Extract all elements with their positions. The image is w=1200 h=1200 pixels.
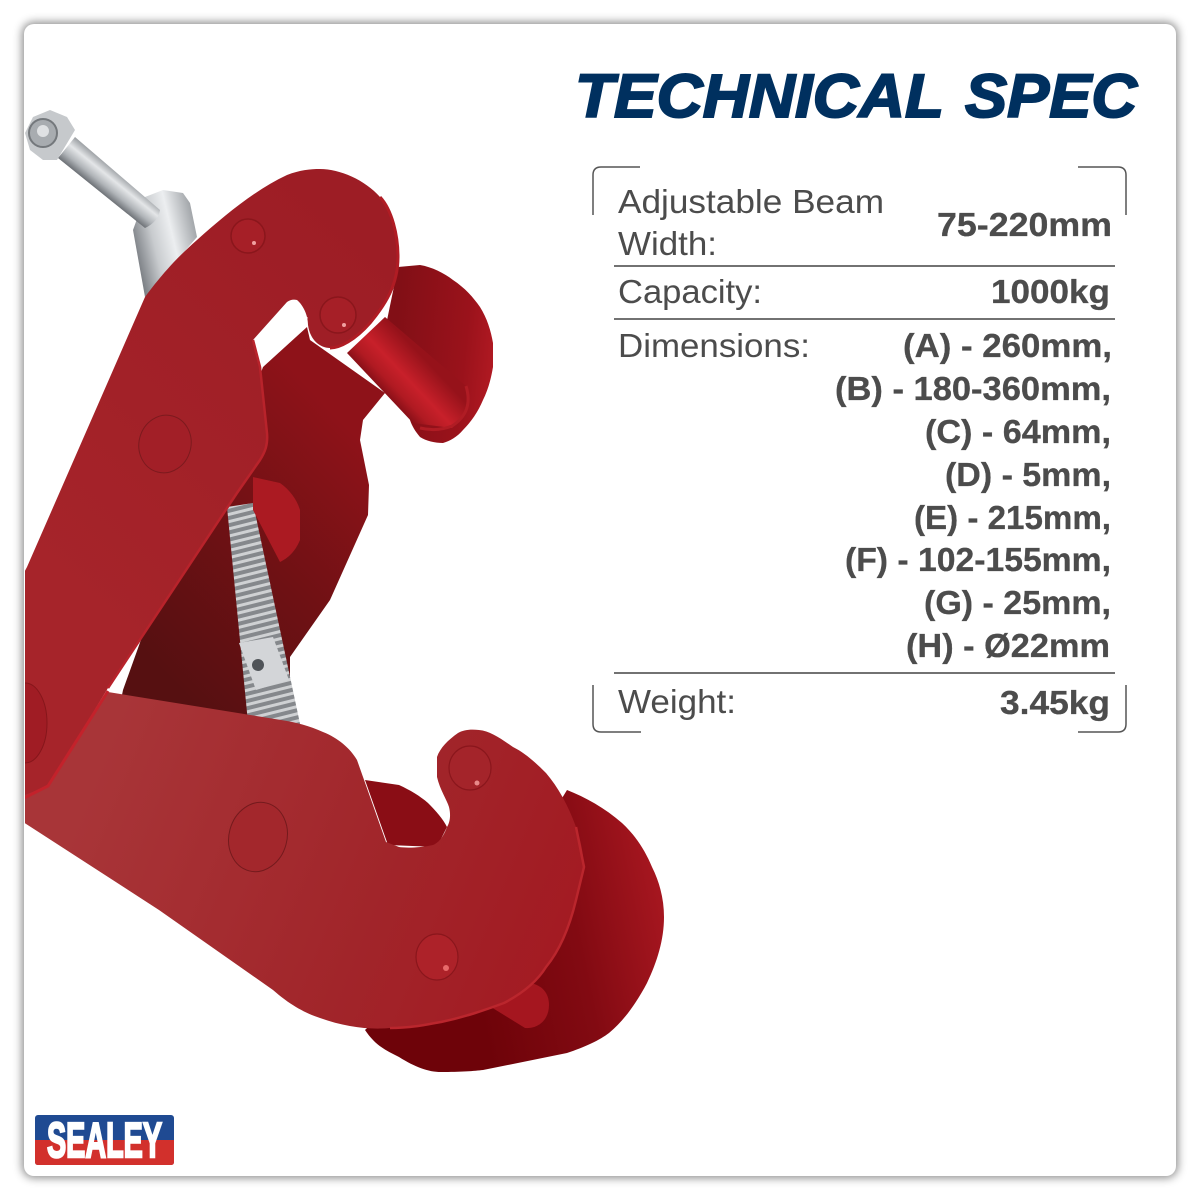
product photo: red beam clamp bbox=[3, 110, 664, 1072]
row: dimensions: Dimensions: bbox=[618, 327, 810, 364]
row: adjustable beam width: Adjustable Beam bbox=[618, 183, 884, 220]
logo: Sealey: SEALEY bbox=[47, 1114, 162, 1168]
row: dimensions: (C) - 64mm, bbox=[925, 413, 1111, 450]
bolt bbox=[231, 219, 265, 253]
row: dimensions: (D) - 5mm, bbox=[945, 456, 1111, 493]
spec table brackets bbox=[593, 167, 1126, 732]
row: weight: Weight: bbox=[618, 683, 736, 720]
row: dimensions: (F) - 102-155mm, bbox=[845, 541, 1111, 578]
pin upper bbox=[347, 317, 468, 428]
row: dimensions: (B) - 180-360mm, bbox=[835, 370, 1111, 407]
row: capacity: 1000kg bbox=[991, 273, 1110, 310]
row: adjustable beam width: Width: bbox=[618, 225, 717, 262]
slot opening bbox=[263, 316, 308, 367]
rivet bbox=[138, 414, 192, 474]
rear plate upper bbox=[115, 327, 385, 740]
row: dimensions: (G) - 25mm, bbox=[924, 584, 1111, 621]
title: SPEC bbox=[965, 62, 1138, 130]
bolt bbox=[449, 746, 491, 790]
row: dimensions: (A) - 260mm, bbox=[903, 327, 1112, 364]
rear centre lobe bbox=[365, 780, 447, 847]
row: dimensions bbox=[618, 327, 1112, 664]
row: capacity bbox=[618, 273, 1110, 310]
collar bbox=[253, 477, 300, 562]
rear disc upper bbox=[385, 265, 493, 443]
title bbox=[575, 62, 1138, 130]
sliding sleeve bbox=[133, 190, 197, 297]
rivet bbox=[228, 802, 288, 872]
row: dimensions: (H) - Ø22mm bbox=[906, 627, 1110, 664]
title: TECHNICAL bbox=[575, 62, 944, 130]
bolt bbox=[320, 297, 356, 333]
row: weight: 3.45kg bbox=[1000, 684, 1110, 721]
bolt bbox=[416, 934, 458, 980]
upper arm front plate bbox=[3, 169, 398, 800]
row: weight bbox=[618, 683, 1110, 721]
threaded screw bbox=[227, 503, 302, 733]
logo: Sealey bbox=[35, 1114, 174, 1168]
row: adjustable beam width: 75-220mm bbox=[937, 206, 1112, 243]
lower pin bbox=[491, 983, 549, 1028]
handle bar bbox=[25, 110, 160, 228]
pivot bbox=[25, 682, 48, 764]
rear lower disc bbox=[365, 790, 664, 1072]
row: dimensions: (E) - 215mm, bbox=[914, 499, 1111, 536]
row: adjustable beam width bbox=[618, 183, 1112, 262]
row: capacity: Capacity: bbox=[618, 273, 762, 310]
lower arm front plate bbox=[20, 691, 584, 1029]
